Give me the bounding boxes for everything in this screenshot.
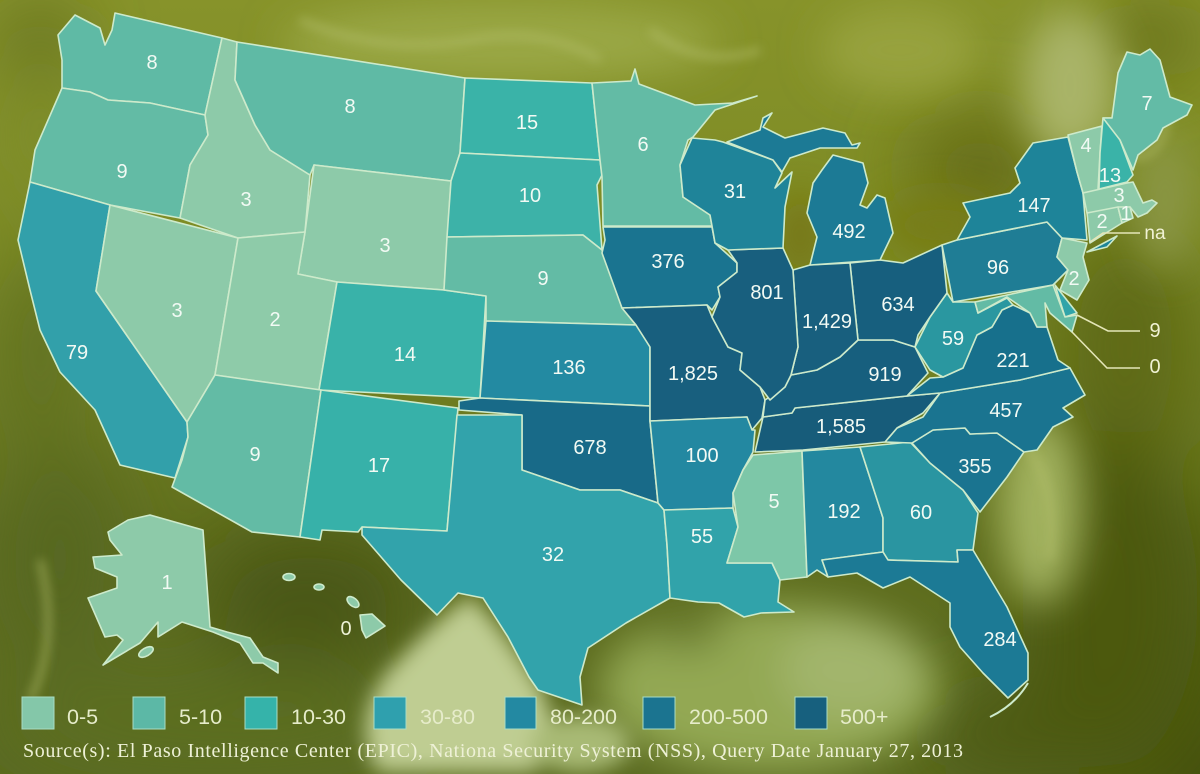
state: South Dakota: 10 [519,185,541,207]
state: Tennessee [755,393,940,452]
callout: na: na [1144,223,1166,244]
state: Pennsylvania: 96 [987,257,1009,279]
state: Kansas: 136 [552,357,586,379]
state: New Hampshire [1099,118,1133,189]
state: South Carolina [912,428,1024,512]
state: Nebraska [444,235,636,325]
state: Washington: 8 [146,52,158,74]
state: California: 79 [66,342,88,364]
state: Kansas [480,321,650,406]
state: South Carolina: 355 [958,456,992,478]
state: Iowa [602,227,737,310]
state: New York [957,137,1087,240]
state: Vermont: 4 [1080,135,1092,157]
legend item: 5-10: 5-10 [179,705,222,729]
state: Illinois: 801 [750,282,784,304]
state: Indiana [791,263,858,375]
state: Massachusetts: 3 [1113,185,1125,207]
state: Utah: 2 [269,309,281,331]
state: Colorado: 14 [394,344,416,366]
state: Louisiana: 55 [691,526,713,548]
state: Minnesota [592,69,757,226]
state: North Carolina [885,368,1085,452]
legend item: 30-80 [374,697,475,729]
state: Kentucky: 919 [868,364,902,386]
state: New York: 147 [1017,195,1051,217]
legend item: 500+ [795,697,888,729]
state: West Virginia [915,293,1013,377]
state: Pennsylvania [942,222,1068,302]
state: Idaho [180,38,310,238]
state: Ohio: 634 [881,294,915,316]
callout: 9 [1077,315,1161,342]
state: Wisconsin [680,138,792,250]
state: Mississippi [727,451,807,580]
state: Montana: 8 [344,96,356,118]
state: Texas: 32 [542,544,564,566]
legend item: 80-200: 80-200 [550,705,617,729]
state: Wyoming: 3 [379,235,391,257]
state: Hawaii [283,574,385,640]
source note: Source(s): El Paso Intelligence Center (EPIC), Nationa Security System (NSS), Query Date January 27, 2013 [23,740,963,762]
state: Louisiana [664,508,794,617]
state: New Hampshire: 13 [1099,165,1121,187]
state: Delaware [1055,285,1077,317]
state: New Jersey: 2 [1068,268,1080,290]
state: Illinois [712,248,798,400]
state: Wyoming [298,165,451,290]
state: Connecticut: 2 [1096,211,1108,233]
callout: 0 [1072,332,1161,378]
state: Minnesota: 6 [637,134,649,156]
legend item: 80-200 [505,697,617,729]
callout: 0: 0 [1149,356,1161,378]
state: Montana [235,42,465,181]
state: Nevada: 3 [171,300,183,322]
state: Vermont [1068,126,1102,193]
state: Missouri: 1,825 [668,363,718,385]
state: California [18,182,188,478]
state: Rhode Island: 1 [1120,203,1132,225]
state: Oregon [30,88,208,218]
state: Connecticut [1087,207,1122,243]
state: Alaska [88,515,278,673]
state: Wisconsin: 31 [724,181,746,203]
state: Washington [58,13,222,115]
state: Maine [1103,49,1192,170]
state: New Jersey [1057,238,1089,300]
state: Texas [362,415,670,705]
legend item: 10-30: 10-30 [291,705,346,729]
state: Maine: 7 [1141,93,1153,115]
state: Kentucky [763,340,928,417]
state: Mississippi: 5 [768,491,780,513]
legend item: 200-500: 200-500 [689,705,768,729]
legend item: 5-10 [133,697,222,729]
state: Utah [215,232,337,390]
state: Michigan: 492 [832,221,866,243]
state: Oregon: 9 [116,161,128,183]
callout: na [1090,223,1166,244]
state: North Carolina: 457 [989,400,1023,422]
state: Idaho: 3 [240,189,252,211]
state: New Mexico [300,390,458,540]
state: Georgia: 60 [910,502,932,524]
state: Oklahoma: 678 [573,437,607,459]
legend item: 500+: 500+ [840,705,888,729]
state: West Virginia: 59 [942,328,964,350]
callout: 9: 9 [1149,320,1161,342]
state: Virginia: 221 [996,350,1030,372]
state: Alabama: 192 [827,501,861,523]
state: Arizona [172,375,321,537]
state: Colorado [319,282,486,398]
state: Hawaii: 0 [340,618,352,640]
state: Iowa: 376 [651,251,685,273]
state: Maryland [975,285,1077,332]
legend item: 30-80: 30-80 [420,705,475,729]
legend item: 0-5 [22,697,98,729]
icon: Florida Keys [990,683,1028,717]
state: Alabama [802,447,883,577]
state: Georgia [860,442,978,562]
state: Nebraska: 9 [537,268,549,290]
state: Nevada [96,205,238,422]
state: Missouri [622,305,765,430]
state: Florida [822,550,1028,698]
icon: Long Island [1087,236,1117,252]
state: Florida: 284 [983,629,1017,651]
legend item: 200-500 [643,697,768,729]
state: New Mexico: 17 [368,455,390,477]
state: Tennessee: 1,585 [816,416,866,438]
state: North Dakota: 15 [516,112,538,134]
legend item: 0-5: 0-5 [67,705,98,729]
state: Oklahoma [459,398,658,503]
state: North Dakota [460,78,600,160]
state: Alaska: 1 [161,572,173,594]
state: Arkansas [650,417,755,510]
legend item: 10-30 [245,697,346,729]
state: Arkansas: 100 [685,445,719,467]
state: Virginia [907,305,1070,396]
legend [22,697,888,729]
state: Indiana: 1,429 [802,311,852,333]
state: Massachusetts [1083,182,1157,217]
state: South Dakota [447,153,602,250]
state: Arizona: 9 [249,444,261,466]
state: Ohio [850,245,947,347]
state: Michigan [727,113,893,265]
